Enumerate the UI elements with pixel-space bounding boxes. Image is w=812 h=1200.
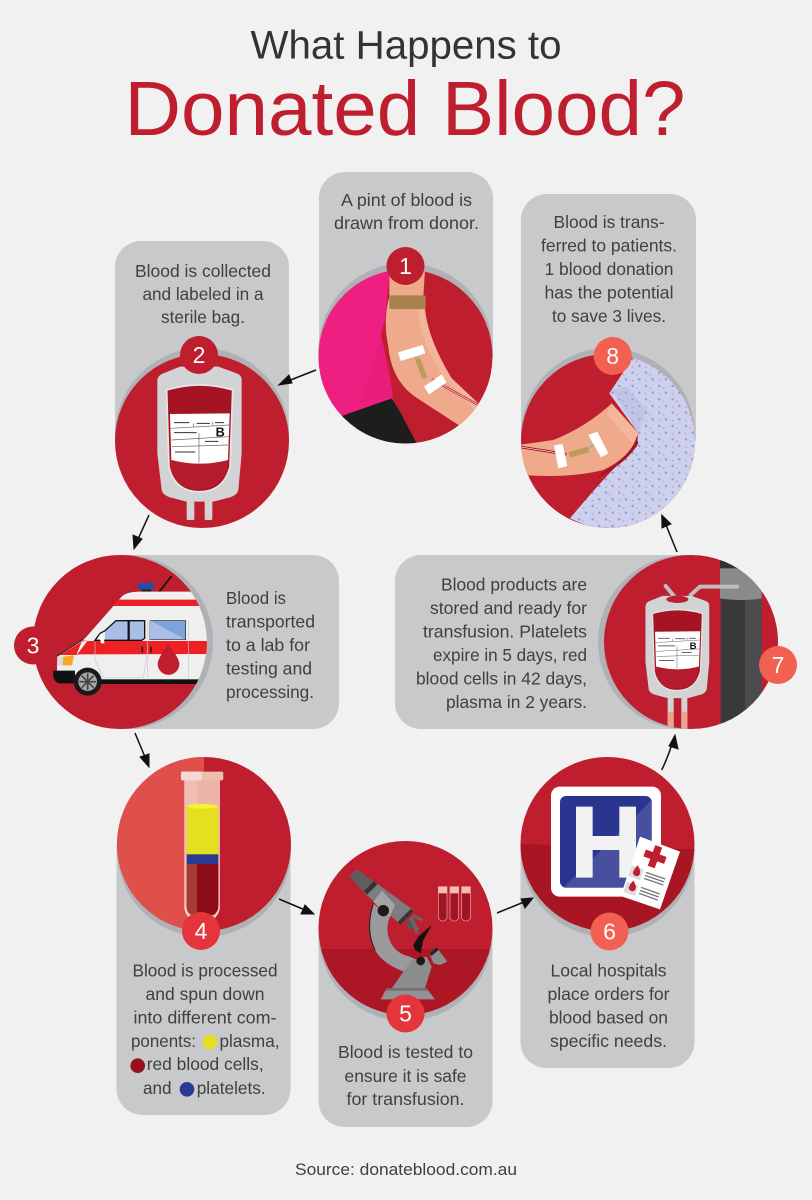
- text: step 8: 1 blood donation: [544, 259, 674, 279]
- panel: step 6 hospital: [517, 757, 697, 1068]
- badge: 7: 7: [772, 652, 784, 678]
- panel: step 4 test tube: [116, 757, 291, 1115]
- text: step 5: Blood is tested to: [338, 1042, 473, 1062]
- text: step 1: drawn from donor.: [334, 213, 479, 233]
- badge: 2: 2: [193, 342, 205, 368]
- badge: 3: 3: [27, 632, 39, 658]
- arrow: 6 to 7: [662, 735, 678, 770]
- arrow: 2 to 3: [133, 515, 149, 549]
- panel: step 2 bag: [115, 241, 289, 528]
- text: step 1: [334, 190, 479, 233]
- icon: test tube: [181, 772, 223, 918]
- badge: 3: [14, 626, 52, 664]
- text: step 6: place orders for: [548, 984, 670, 1004]
- text: step 4: and spun down: [146, 984, 264, 1004]
- text: step 4: [131, 960, 280, 1098]
- badge: 7: [759, 646, 797, 684]
- text: step 8: Blood is trans-: [554, 212, 665, 232]
- arrow: 7 to 8: [662, 515, 677, 552]
- text: step 7: expire in 5 days, red: [433, 645, 587, 665]
- icon: background half: [117, 757, 204, 931]
- title: What Happens to: [250, 24, 562, 68]
- text: step 1: A pint of blood is: [341, 190, 472, 210]
- badge: 2: [180, 336, 218, 374]
- badge: 6: 6: [603, 918, 616, 944]
- badge: 8: [594, 337, 632, 375]
- icon: table band: [321, 949, 490, 1013]
- text: step 5: ensure it is safe: [344, 1066, 466, 1086]
- panel: step 5 microscope: [310, 841, 500, 1127]
- legend: red blood cells dot: [130, 1058, 145, 1073]
- icon: blood bag: B: [216, 426, 225, 440]
- badge: 8: 8: [606, 343, 619, 369]
- text: step 3: processing.: [226, 682, 314, 702]
- arrow: 3 to 4: [135, 733, 149, 767]
- badge: 1: [386, 247, 424, 285]
- text: step 2: sterile bag.: [161, 307, 245, 327]
- text: step 7: plasma in 2 years.: [446, 692, 587, 712]
- panel: step 8 patient: [521, 194, 696, 528]
- text: step 2: Blood is collected: [135, 261, 271, 281]
- arrow: 1 to 2: [279, 370, 316, 385]
- text: step 7: blood cells in 42 days,: [416, 668, 587, 688]
- text: step 3: to a lab for: [226, 635, 310, 655]
- text: step 7: transfusion. Platelets: [423, 622, 587, 642]
- text: step 3: [226, 588, 315, 702]
- badge: 4: 4: [195, 918, 208, 944]
- text: step 4: Blood is processed: [132, 960, 278, 980]
- icon: arm drawing blood: [318, 271, 479, 444]
- icon: blood bag: [157, 367, 242, 520]
- text: step 6: specific needs.: [550, 1031, 667, 1051]
- badge: 1: 1: [399, 253, 412, 279]
- icon: bag on IV pole: B: [690, 641, 697, 652]
- badge: 4: [182, 912, 220, 950]
- legend: platelets dot: [180, 1082, 194, 1097]
- panel: step 7 storage: [395, 553, 797, 730]
- text: step 4: and: [143, 1078, 172, 1098]
- arrow: 5 to 6: [497, 898, 533, 913]
- text: step 7: Blood products are: [441, 574, 587, 594]
- badge: 5: 5: [399, 1000, 412, 1026]
- icon: microscope: [349, 869, 470, 999]
- text: step 3: testing and: [226, 658, 312, 678]
- text: step 6: [548, 960, 670, 1051]
- text: step 8: to save 3 lives.: [552, 306, 666, 326]
- text: step 3: Blood is: [226, 588, 286, 608]
- title: [124, 24, 686, 152]
- icon: arm receiving blood: [521, 358, 695, 528]
- text: step 6: Local hospitals: [550, 960, 667, 980]
- legend: plasma dot: [203, 1035, 217, 1049]
- icon: hospital sign: [517, 787, 697, 933]
- arrow: 4 to 5: [279, 899, 314, 914]
- text: step 2: [135, 261, 271, 327]
- icon: bag on IV pole: [645, 553, 762, 730]
- text: step 5: for transfusion.: [346, 1089, 464, 1109]
- text: step 4: platelets.: [197, 1078, 266, 1098]
- panel: step 3 ambulance: [14, 555, 339, 729]
- text: step 4: into different com-: [134, 1008, 277, 1028]
- source: Source: donateblood.com.au: [295, 1160, 517, 1179]
- text: step 5: [338, 1042, 473, 1109]
- text: step 8: [541, 212, 677, 326]
- text: step 3: transported: [226, 612, 315, 632]
- icon: ambulance: [53, 576, 220, 696]
- text: step 8: ferred to patients.: [541, 236, 677, 256]
- panel: step 1 donor: [310, 172, 493, 447]
- text: step 6: blood based on: [549, 1008, 668, 1028]
- text: step 4: red blood cells,: [147, 1054, 264, 1074]
- badge: 5: [386, 994, 424, 1032]
- text: step 4: ponents:: [131, 1031, 196, 1051]
- badge: 6: [590, 912, 628, 950]
- text: step 8: has the potential: [544, 282, 674, 302]
- text: step 7: stored and ready for: [430, 598, 587, 618]
- text: step 2: and labeled in a: [142, 284, 264, 304]
- title: Donated Blood?: [124, 66, 686, 152]
- text: step 7: [416, 574, 587, 712]
- text: step 4: plasma,: [220, 1031, 280, 1051]
